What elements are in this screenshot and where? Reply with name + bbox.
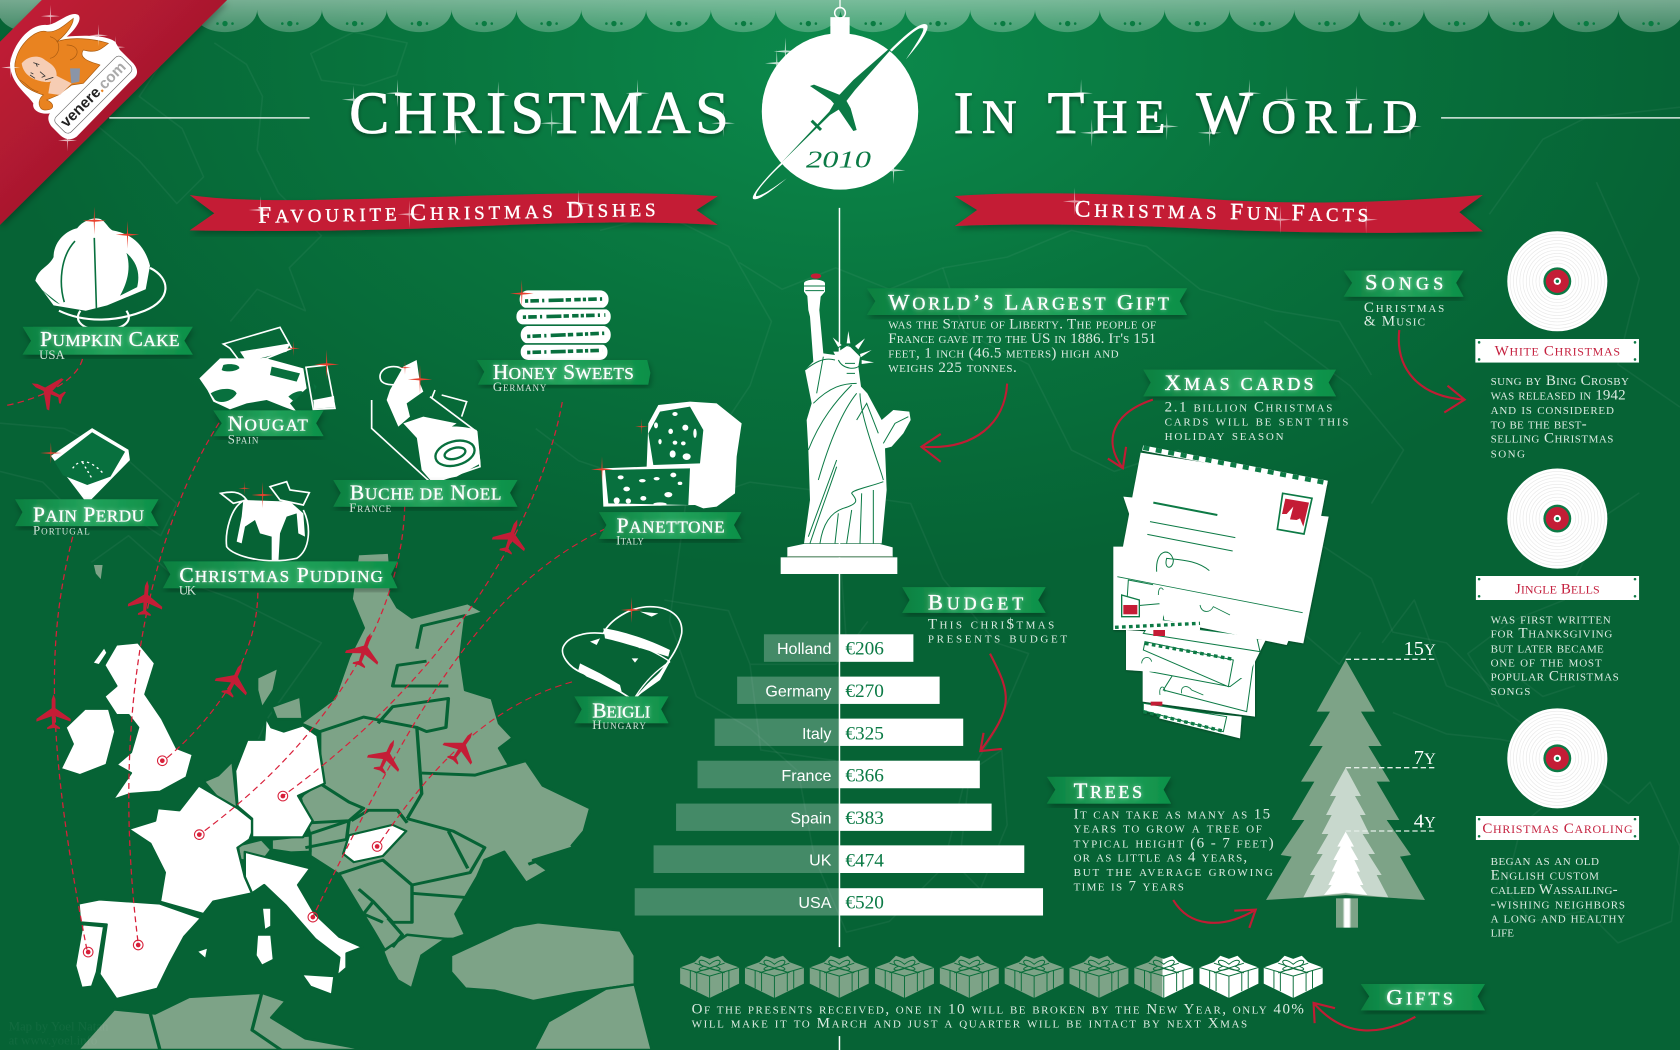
text: White Christmas: sung by Bing Crosby (1491, 373, 1629, 389)
statue of liberty (781, 273, 911, 574)
banner: Pumpkin Cake (22, 327, 193, 362)
text: Xmas Cards: cards will be sent this (1165, 414, 1348, 430)
text: Christmas Caroling: called Wassailing- (1491, 882, 1618, 898)
text: Christmas Caroling: life (1491, 925, 1514, 941)
title: In The World: IN THE WORLD (954, 80, 1418, 146)
title: Christmas: CHRISTMAS (349, 80, 729, 146)
banner: Pumpkin Cake: PUMPKIN CAKE (40, 327, 179, 351)
heading: Xmas Cards: XMAS CARDS (1165, 370, 1314, 395)
banner: Beigli: BEIGLI (592, 698, 651, 722)
venere.com logo: venere.com (57, 59, 130, 131)
bar chart: budget: Germany (765, 682, 831, 700)
bar chart: budget: Holland (777, 640, 831, 658)
text: Songs: & Music (1364, 314, 1425, 330)
text: Budget: presents budget (928, 630, 1067, 646)
Europe map (61, 553, 652, 1050)
banner: Honey Sweets (477, 360, 650, 394)
text: White Christmas: selling Christmas (1491, 431, 1613, 447)
text: White Christmas: to be the best- (1491, 416, 1587, 432)
heading ribbon: fun facts (955, 188, 1483, 234)
dish: nougat, buche, pudding (199, 327, 481, 563)
bar chart: budget: €366 (845, 766, 884, 787)
text: World's Largest Gift (888, 316, 1156, 376)
arrow: trees (1173, 900, 1256, 928)
logo sparkles (1, 5, 125, 151)
song: White Christmas: WHITE CHRISTMAS (1495, 344, 1620, 360)
bar chart: budget: €270 (845, 681, 884, 702)
dish: pumpkin cake (35, 207, 165, 330)
text: White Christmas: song (1491, 445, 1525, 461)
song: Christmas Caroling: CHRISTMAS CAROLING (1482, 821, 1633, 837)
flight routes (54, 402, 606, 951)
banner: Panettone (599, 512, 741, 547)
banner: Christmas Pudding: CHRISTMAS PUDDING (179, 563, 383, 587)
text: Jingle Bells: popular Christmas (1491, 669, 1619, 685)
map credit (9, 1020, 109, 1048)
text: Trees: time is 7 years (1074, 878, 1184, 894)
dish: pain perdu (40, 428, 130, 504)
banner: Nougat: NOUGAT (228, 412, 308, 436)
banner: Panettone: PANETTONE (617, 513, 725, 537)
arrow: gifts (1314, 1003, 1415, 1030)
song: Christmas Caroling (1476, 708, 1639, 840)
arrow: gift to statue (921, 384, 1007, 462)
venere.com logo (10, 14, 137, 139)
heading: Gifts: GIFTS (1386, 984, 1453, 1009)
text: Jingle Bells: songs (1491, 683, 1530, 699)
banner: Beigli (574, 696, 669, 732)
text: Xmas Cards: holiday season (1165, 428, 1284, 444)
text: Jingle Bells: but later became (1491, 640, 1604, 656)
dish: honey sweets (510, 280, 611, 360)
text: Xmas Cards: 2.1 billion Christmas (1165, 399, 1332, 415)
heading: Trees: TREES (1074, 778, 1142, 803)
text: Trees: but the average growing (1074, 864, 1273, 880)
banner: Pumpkin Cake: USA (39, 348, 66, 362)
red corner ribbon (0, 0, 227, 225)
tree height labels: 7Y (1414, 747, 1436, 769)
banner: Panettone: Italy (616, 533, 644, 547)
heading ribbon: dishes: FAVOURITE CHRISTMAS DISHES (258, 196, 656, 229)
envelope stack (1113, 448, 1329, 738)
map credit: at www.yoel.info (9, 1034, 97, 1048)
heading: Trees (1047, 777, 1171, 804)
tree growth chart (1266, 659, 1437, 928)
bar chart: budget: France (781, 767, 831, 785)
text: World's Largest Gift: France gave it to the US in 1886. It's 151 (888, 331, 1156, 347)
banner: Nougat (213, 410, 324, 447)
gifts row (680, 956, 1323, 998)
ornament with plane and 2010: 2010 (806, 147, 872, 174)
text: Trees: It can take as many as 15 (1074, 806, 1270, 822)
banner: Buche de Noel (333, 480, 518, 515)
banner: Pain Perdu: Portugal (33, 524, 90, 538)
text: White Christmas: and is considered (1491, 402, 1614, 418)
heading: Songs: SONGS (1365, 269, 1443, 294)
bar chart: budget (635, 634, 1043, 916)
heading: Budget: BUDGET (928, 590, 1023, 615)
text: Songs: Christmas (1364, 300, 1444, 316)
text: Trees: or as little as 4 years, (1074, 850, 1247, 866)
banner: Nougat: Spain (228, 433, 259, 447)
song: White Christmas (1475, 231, 1639, 363)
scalloped top band (0, 0, 1680, 32)
banner: Christmas Pudding (163, 561, 398, 598)
text: Trees: years to grow a tree of (1074, 821, 1262, 837)
banner: Honey Sweets: HONEY SWEETS (493, 360, 634, 384)
bar chart: budget: Spain (790, 809, 831, 827)
city pins (83, 756, 382, 957)
text: Christmas Caroling: English custom (1491, 867, 1599, 883)
banner: Buche de Noel: France (349, 501, 392, 515)
text: World's Largest Gift: was the Statue of Liberty. The people of (888, 316, 1156, 332)
text: Jingle Bells: for Thanksgiving (1491, 626, 1612, 642)
bar chart: budget: €206 (845, 639, 884, 660)
text: World's Largest Gift: feet, 1 inch (46.5 meters) high and (888, 345, 1119, 361)
tree height labels: 15Y (1404, 638, 1436, 660)
heading: World's Largest Gift: WORLD’S LARGEST GIFT (888, 290, 1169, 315)
text: White Christmas: was released in 1942 (1491, 387, 1626, 403)
bar chart: budget: Italy (802, 725, 831, 743)
arrow: budget (980, 654, 1006, 751)
text: Trees (1074, 806, 1274, 894)
central vertical axis (838, 208, 840, 1050)
bar chart: budget: €383 (845, 808, 884, 829)
arrow: cards (1108, 400, 1153, 468)
title sparkles (342, 79, 1422, 147)
title rules (109, 117, 1680, 119)
song: Jingle Bells: JINGLE BELLS (1515, 581, 1600, 597)
banner: Beigli: Hungary (592, 718, 646, 732)
banner: Buche de Noel: BUCHE DE NOEL (350, 480, 501, 504)
text: World's Largest Gift: weighs 225 tonnes. (888, 360, 1017, 376)
tree height labels (1404, 638, 1436, 833)
text: gifts: Of the presents received, one in 10 will be broken by the New Year, only 40% (692, 1001, 1304, 1017)
banner: Honey Sweets: Germany (493, 380, 547, 394)
text: Jingle Bells: was first written (1491, 611, 1611, 627)
ornament with plane and 2010 (753, 0, 928, 199)
text: Christmas Caroling (1491, 853, 1625, 941)
tree height labels: 4Y (1414, 811, 1436, 833)
heading: Songs (1344, 269, 1464, 297)
text: Jingle Bells: one of the most (1491, 655, 1602, 671)
text: White Christmas (1491, 373, 1629, 461)
banner: Christmas Pudding: UK (179, 584, 197, 598)
arrow: songs (1399, 330, 1465, 412)
bar chart: budget: €520 (845, 893, 884, 914)
text: Jingle Bells (1491, 611, 1619, 699)
map credit: Map by Yoel Natan (9, 1020, 109, 1034)
text: Christmas Caroling: began as an old (1491, 853, 1599, 869)
bar chart: budget: €325 (845, 723, 884, 744)
heading ribbon: fun facts: CHRISTMAS FUN FACTS (1075, 196, 1369, 228)
heading: Gifts (1361, 984, 1485, 1010)
banner: Pain Perdu (15, 499, 159, 538)
bar chart: budget: USA (798, 894, 832, 912)
text: gifts: will make it to March and just a quarter will be intact by next Xmas (692, 1015, 1247, 1032)
heading: Budget (902, 587, 1046, 615)
dish: panettone and beigli (562, 402, 742, 700)
text: Budget: This chri$tmas (928, 616, 1054, 632)
text: Budget (928, 616, 1067, 646)
text: gifts (692, 1001, 1304, 1032)
song: Jingle Bells (1476, 469, 1639, 600)
text: Songs (1364, 300, 1444, 330)
bar chart: budget: €474 (845, 850, 884, 871)
text: Trees: typical height (6 - 7 feet) (1074, 835, 1274, 851)
banner: Pain Perdu: PAIN PERDU (33, 502, 144, 526)
text: Christmas Caroling: a long and healthy (1491, 910, 1625, 926)
route: pumpkin cake (3, 359, 82, 406)
red planes (24, 368, 533, 779)
heading ribbon: dishes (190, 190, 718, 231)
bar chart: budget: UK (809, 852, 832, 870)
text: Christmas Caroling: -wishing neighbors (1491, 896, 1625, 912)
text: Xmas Cards (1165, 399, 1348, 444)
